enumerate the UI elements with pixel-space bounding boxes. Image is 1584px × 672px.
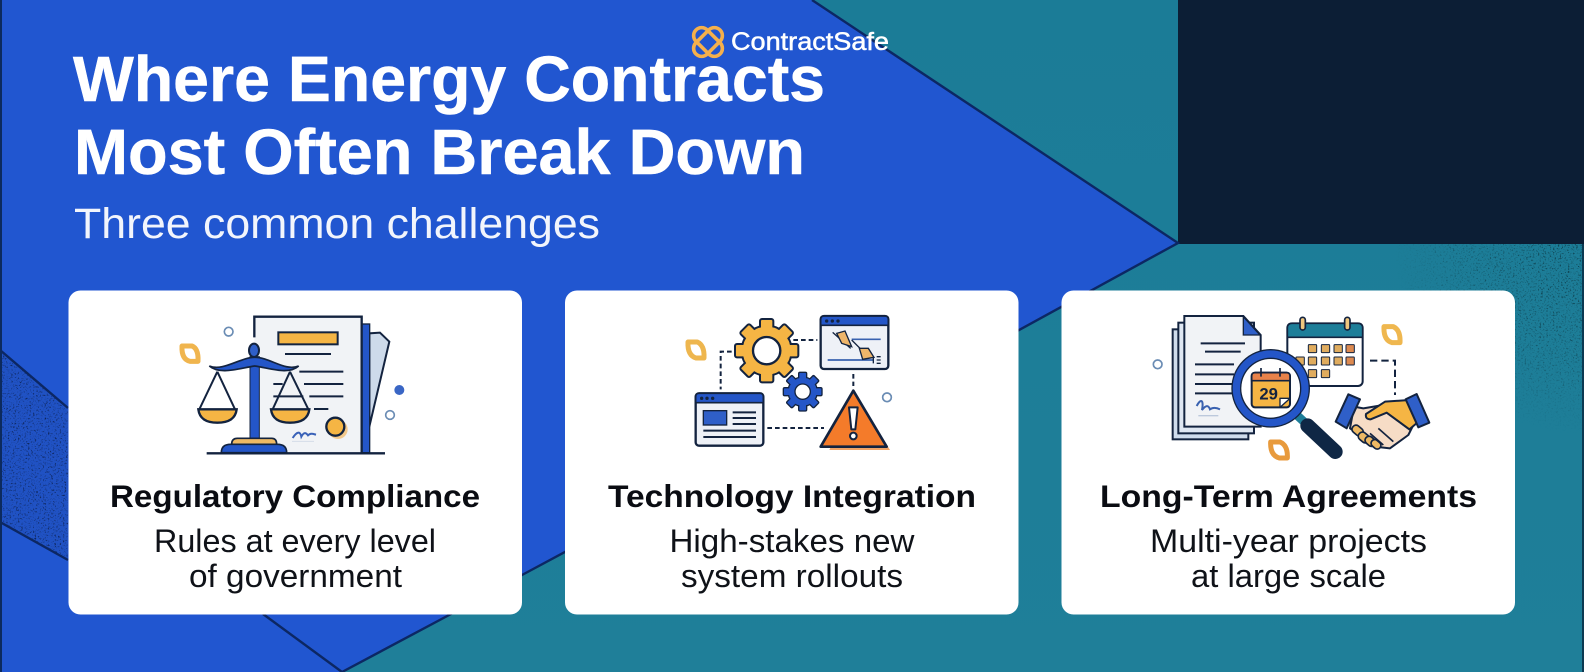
icon: gears, windows and warning	[688, 316, 891, 450]
card description: Multi-year projects	[1150, 523, 1427, 559]
card description	[670, 523, 915, 594]
icon: scales and contract	[182, 317, 404, 453]
card background	[1062, 290, 1515, 614]
frame: left edge	[0, 0, 2, 672]
subtitle: Three common challenges	[74, 200, 600, 248]
title	[73, 43, 825, 188]
card heading: Regulatory Compliance	[110, 478, 480, 514]
card description	[154, 523, 436, 594]
panel: long-term agreements	[1062, 290, 1515, 614]
panel: regulatory compliance	[68, 290, 522, 614]
background: speckle top right	[1406, 244, 1582, 418]
background: blue polygon	[0, 0, 1178, 672]
card heading: Technology Integration	[608, 478, 976, 514]
background: edge lines	[0, 0, 1178, 672]
calendar date: 29	[1259, 384, 1278, 403]
logo wordmark: ContractSafe	[731, 28, 889, 56]
card heading: Long-Term Agreements	[1100, 478, 1477, 514]
icon: interlocked loops	[690, 24, 726, 60]
background: speckled left band	[0, 350, 68, 560]
card description	[1150, 523, 1427, 594]
card description: High-stakes new	[670, 523, 915, 559]
card background	[565, 290, 1018, 614]
frame: right edge	[1582, 244, 1584, 672]
title: Most Often Break Down	[74, 116, 805, 188]
background: navy block	[1178, 0, 1584, 244]
card description: system rollouts	[681, 558, 903, 594]
card description: of government	[189, 558, 402, 594]
title: Where Energy Contracts	[73, 43, 825, 115]
icon: documents, calendar, magnifier, handshake	[1153, 316, 1429, 458]
card description: at large scale	[1191, 558, 1386, 594]
panel: technology integration	[565, 290, 1018, 614]
logo: ContractSafe	[690, 24, 889, 60]
card description: Rules at every level	[154, 523, 436, 559]
card background	[68, 290, 522, 614]
